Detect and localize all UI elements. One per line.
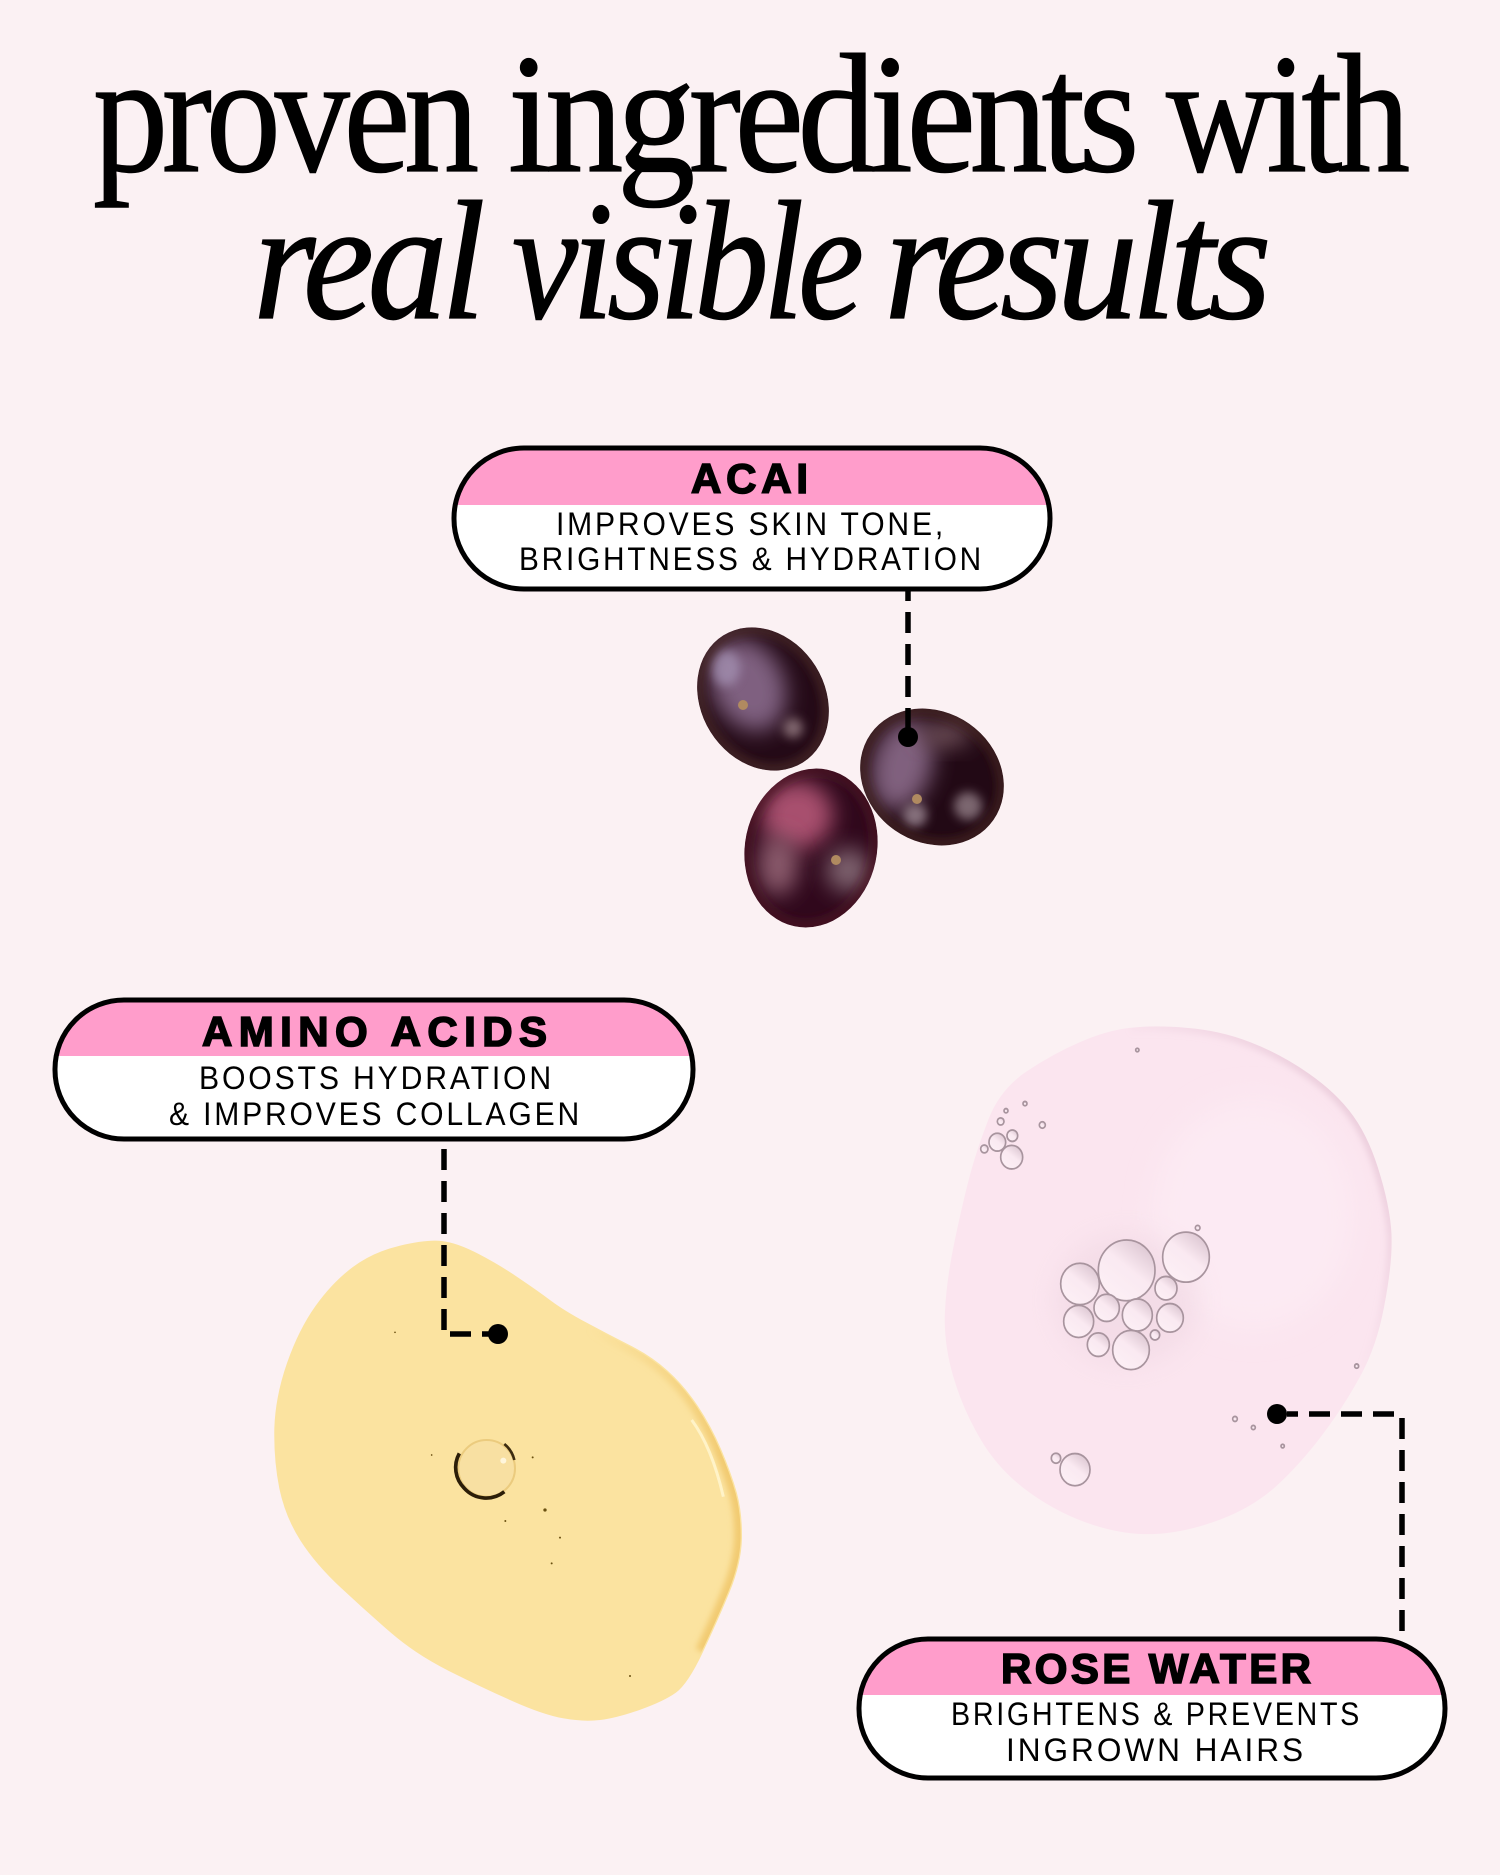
callout: acai: BRIGHTNESS & HYDRATION — [519, 541, 984, 577]
image: pink rose water drop — [945, 1026, 1392, 1534]
acai berry right — [860, 708, 1004, 846]
bubbles — [981, 1048, 1359, 1486]
callout: amino acids — [55, 1000, 693, 1139]
connector: rose water — [1267, 1404, 1402, 1636]
callout: rose water: BRIGHTENS & PREVENTS — [951, 1696, 1362, 1732]
callout: amino acids: & IMPROVES COLLAGEN — [169, 1096, 582, 1132]
connector: amino acids — [444, 1149, 508, 1344]
title — [93, 20, 1408, 355]
image: yellow amino acid drop — [276, 1242, 741, 1719]
title: ingredients — [508, 20, 1135, 208]
title: results — [884, 167, 1268, 355]
callout: rose water — [859, 1639, 1445, 1778]
callout: rose water: INGROWN HAIRS — [1006, 1732, 1306, 1768]
acai berry top left — [697, 627, 829, 771]
title: visible — [512, 167, 861, 355]
acai berry bottom — [744, 768, 878, 928]
title: real — [253, 167, 483, 355]
title: proven — [93, 20, 477, 208]
callout: amino acids: BOOSTS HYDRATION — [199, 1060, 554, 1096]
cluster shadow — [1055, 1236, 1198, 1364]
image: acai berries — [697, 627, 1004, 928]
callout: acai: IMPROVES SKIN TONE, — [556, 506, 946, 542]
title: with — [1166, 20, 1408, 208]
callout: acai — [454, 448, 1050, 589]
callout: rose water: ROSE WATER — [1001, 1645, 1312, 1692]
callout: amino acids: AMINO ACIDS — [202, 1008, 548, 1055]
connector: acai — [898, 591, 918, 747]
callout: acai: ACAI — [691, 455, 809, 502]
